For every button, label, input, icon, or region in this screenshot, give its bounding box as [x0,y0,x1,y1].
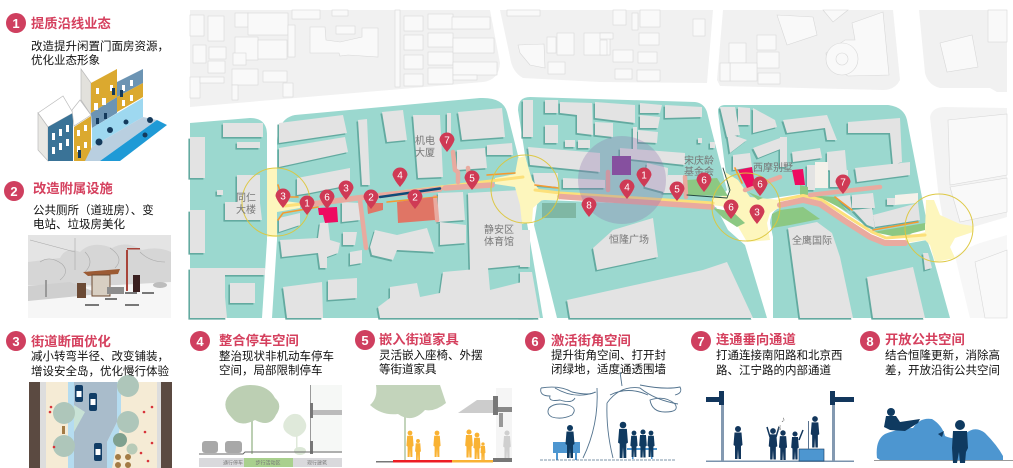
location pins: 5 [674,184,680,196]
place names: 机电 [415,134,435,147]
illustration: passage with performers: ♪ [781,415,785,424]
panel 4: 整合停车空间: 整合停车空间 [219,332,299,348]
location pins: 5 [469,174,475,184]
location pins: 6 [757,180,763,190]
panel 7: 连通垂向通道: 连通垂向通道 [716,331,796,347]
panel 6: 激活街角空间: 提升街角空间、打开封 [551,348,666,362]
purple focus circle [578,136,666,224]
place names: 全鹰国际 [792,234,832,247]
place names: 大厦 [415,146,435,159]
illustration: parking section: 步行活动区 [255,460,281,466]
panel 5: 嵌入街道家具: 灵活嵌入座椅、外摆 [379,348,482,362]
location pins: 2 [368,192,374,204]
location pins: 7 [840,178,846,188]
illustration: public seating mound [874,408,1013,463]
place names: 静安区 [484,223,514,236]
location pins: 6 [701,176,707,186]
location pins: 8 [586,200,592,212]
panel 4: 整合停车空间: 4 [196,334,204,349]
panel 3: 街道断面优化: 增设安全岛，优化慢行体验 [31,364,169,378]
panel 8: 开放公共空间: 结合恒隆更新，消除高 [885,348,1000,362]
panel 7: 连通垂向通道: 打通连接南阳路和北京西 [716,348,842,362]
panel 6: 激活街角空间 [525,331,681,460]
panel 2: 改造附属设施: 公共厕所（道班房）、变 [33,203,154,217]
location pins: 4 [624,182,630,194]
location pins: 1 [641,170,647,182]
teal street blocks [190,97,950,318]
panel 6: 激活街角空间: 闭绿地，适度通透围墙 [551,362,666,376]
illustration: tree and seating [540,372,681,460]
illustration: parking section: 现行建筑 [307,460,327,466]
panel 5: 嵌入街道家具: 嵌入街道家具 [379,331,459,347]
panel 4: 整合停车空间 [190,331,342,467]
location pins: 4 [397,170,403,182]
panel 1: 提质沿线业态: 1 [12,16,20,31]
location pins: 1 [304,198,310,210]
panel 4: 整合停车空间: 整治现状非机动车停车 [219,349,334,363]
panel 3: 街道断面优化: 3 [12,334,20,349]
panel 3: 街道断面优化: 减小转弯半径、改变铺装， [31,349,169,363]
panel 7: 连通垂向通道: 7 [697,334,705,349]
illustration: facility sketch [28,235,171,318]
place names: 大楼 [236,203,256,216]
illustration: furniture section [370,385,512,462]
location pins: 6 [728,202,734,214]
panel 7: 连通垂向通道: 路、江宁路的内部通道 [716,363,831,377]
illustration: parking section: 通行停车 [223,460,243,466]
intersection circles [242,155,973,262]
green planted areas [542,178,925,237]
illustration: isometric shopfront [38,69,167,161]
place names: 基金会 [684,165,714,178]
panel 6: 激活街角空间: 6 [531,334,539,349]
panel 8: 开放公共空间: 8 [866,334,874,349]
outlined context buildings [190,10,1007,318]
panel 8: 开放公共空间: 开放公共空间 [885,331,965,347]
corridor: yellow path and pink paving [278,152,925,248]
surrounding gray city blocks [190,10,1007,318]
illustration: passage with performers [706,391,854,462]
place names: 恒隆广场 [609,233,649,246]
place names: 宋庆龄 [684,154,714,167]
location pins: 3 [343,184,349,194]
panel 8: 开放公共空间: 差，开放沿街公共空间 [885,363,1000,377]
location pins: 7 [444,136,450,146]
panel 3: 街道断面优化 [6,331,172,468]
illustration: passage with performers: ♫ [776,423,782,432]
renovated buildings [318,167,805,223]
location pins: 2 [412,192,418,204]
illustration: street plan [29,375,172,468]
panel 5: 嵌入街道家具 [355,330,512,462]
panel 1: 提质沿线业态 [6,13,169,161]
panel 1: 提质沿线业态: 优化业态形象 [31,53,100,67]
place names: 同仁 [236,192,256,204]
panel 2: 改造附属设施 [4,180,171,318]
location pins: 6 [324,192,330,204]
location pins [276,132,850,224]
place names [236,134,832,248]
panel 2: 改造附属设施: 电站、垃圾房美化 [33,217,125,231]
pale yellow intersections [267,156,973,262]
panel: master plan map [188,10,1007,320]
panel 2: 改造附属设施: 改造附属设施 [33,180,113,196]
panel 2: 改造附属设施: 2 [10,184,18,199]
panel 5: 嵌入街道家具: 5 [361,333,369,348]
map buildings with shadow [188,100,932,320]
panel 1: 提质沿线业态: 改造提升闲置门面房资源， [31,39,169,53]
panel 3: 街道断面优化: 街道断面优化 [31,333,111,349]
location pins: 3 [280,192,286,202]
panel 1: 提质沿线业态: 提质沿线业态 [31,15,111,31]
illustration: parking section [199,385,342,467]
place names: 西摩别墅 [753,161,793,174]
panel 7: 连通垂向通道 [691,331,854,462]
location pins: 3 [754,208,760,218]
panel 4: 整合停车空间: 空间，局部限制停车 [219,363,322,377]
panel 8: 开放公共空间 [860,331,1013,463]
panel 5: 嵌入街道家具: 等街道家具 [379,362,437,376]
panel 6: 激活街角空间: 激活街角空间 [551,332,631,348]
place names: 体育馆 [484,235,514,248]
